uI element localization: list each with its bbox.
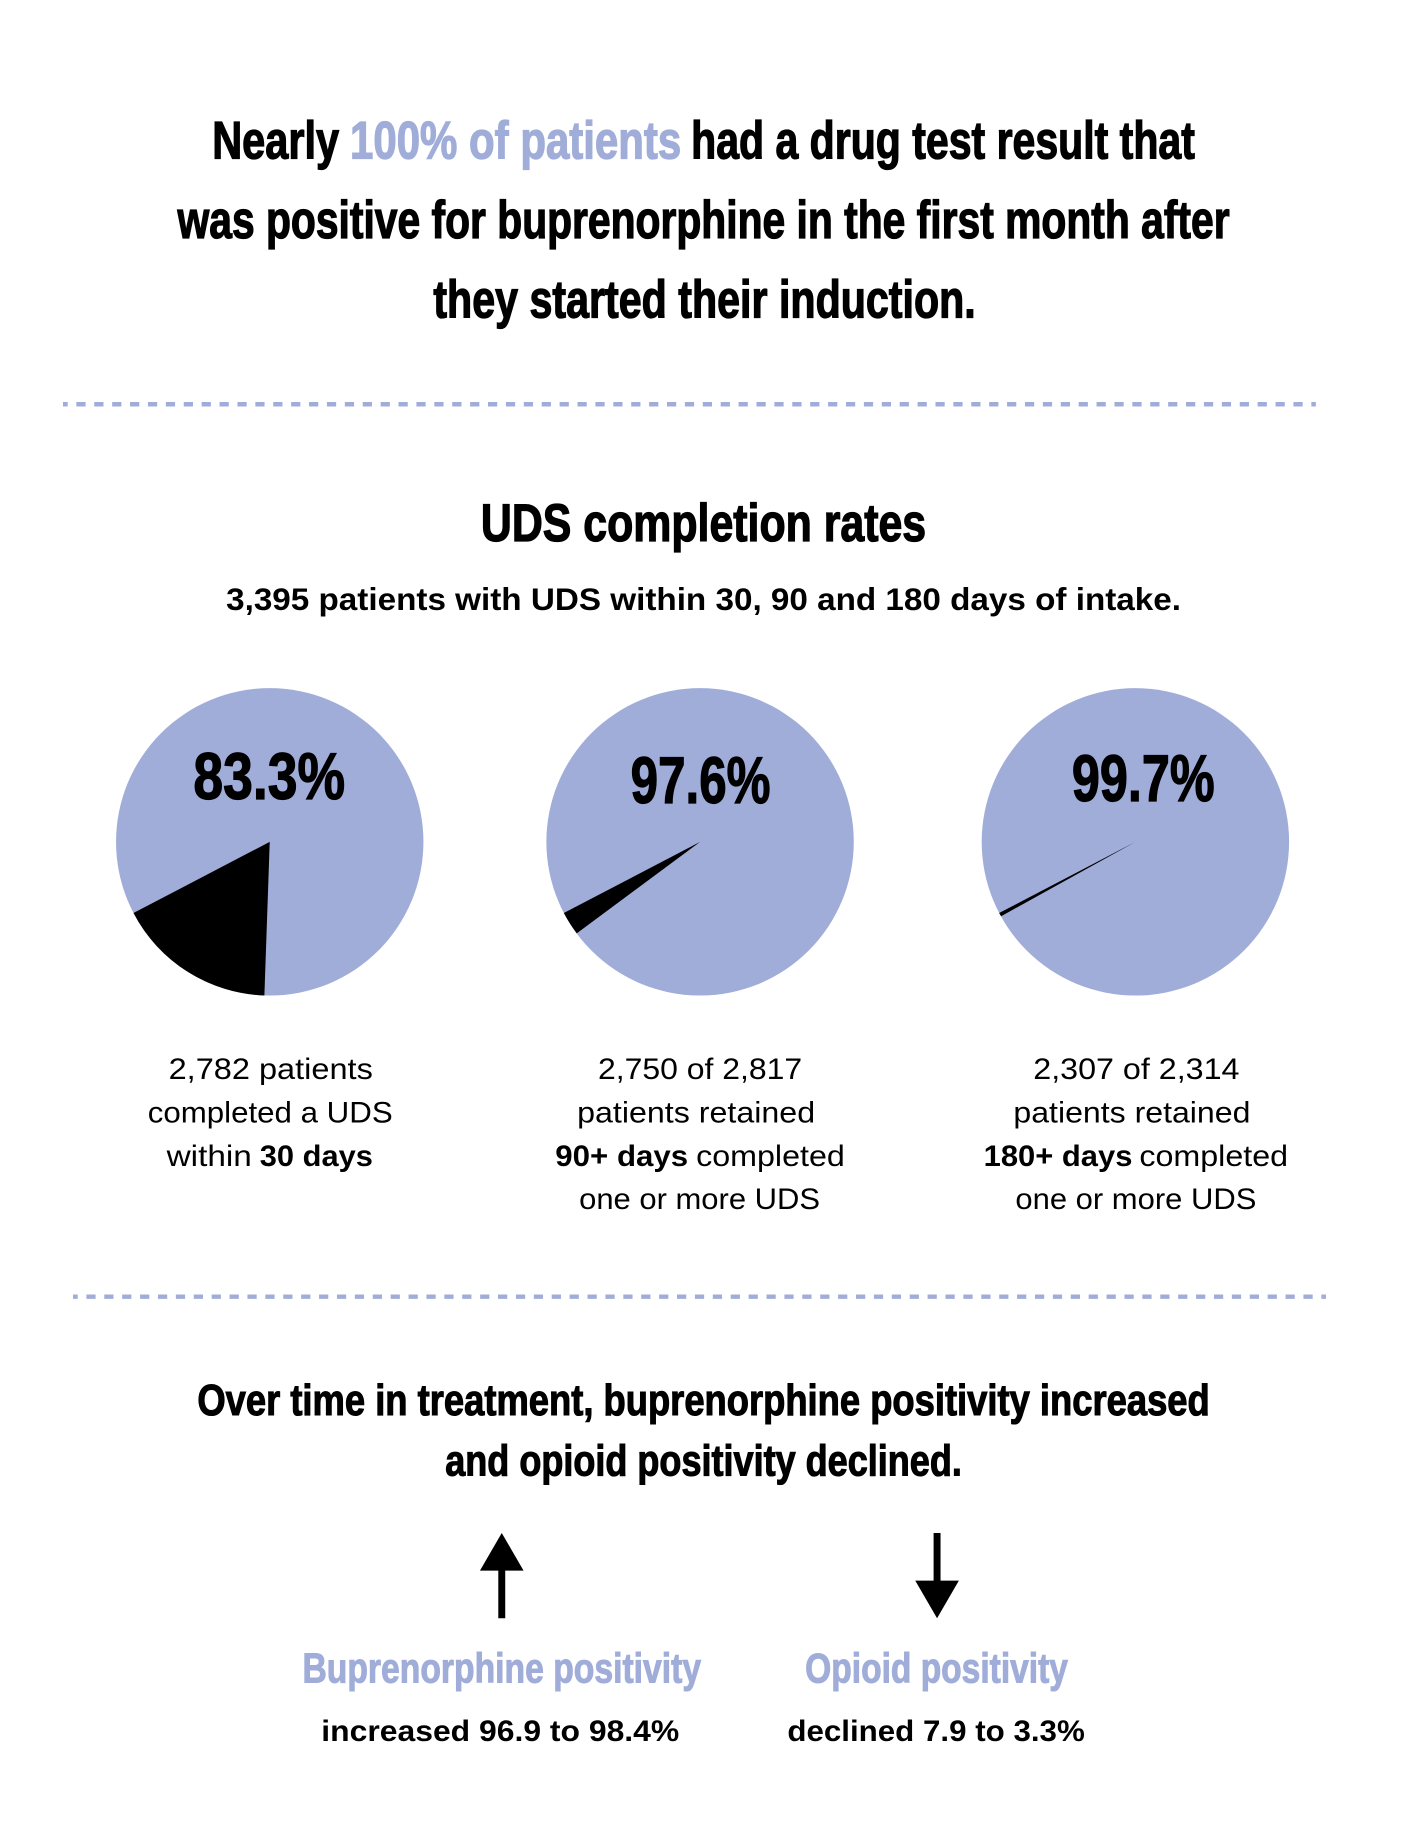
caption: 180+ days: completed	[1139, 1140, 1288, 1173]
value: increased: increased 96.9 to 98.4%	[321, 1715, 679, 1748]
heading: buprenorphine and opioid positivity: and opioid positivity declined.	[445, 1437, 962, 1485]
pie chart: 83.3%	[116, 688, 423, 996]
pie chart: 99.7%	[982, 688, 1289, 996]
caption: 90+ days	[555, 1053, 845, 1216]
subheading: 3,395 patients with UDS within 30, 90 and 180 days of intake.	[226, 581, 1181, 617]
title: they started their induction.	[433, 270, 976, 329]
pie chart: 83.3%: 83.3%	[193, 740, 345, 813]
caption: 180+ days	[984, 1053, 1288, 1216]
title: had a drug test result that	[691, 112, 1195, 171]
caption: 30 days	[148, 1053, 393, 1173]
arrow: down	[915, 1533, 959, 1618]
title	[177, 112, 1230, 329]
label: opioid positivity: Opioid positivity	[805, 1645, 1068, 1692]
caption: 180+ days: patients retained	[1013, 1096, 1250, 1129]
heading: buprenorphine and opioid positivity	[197, 1377, 1210, 1485]
title: 100% of patients	[350, 112, 681, 171]
caption: 30 days: 30 days	[260, 1140, 373, 1173]
value: declined: declined 7.9 to 3.3%	[787, 1715, 1085, 1748]
caption: 90+ days: one or more UDS	[579, 1183, 820, 1216]
caption: 90+ days: completed	[696, 1140, 845, 1173]
caption: 180+ days: one or more UDS	[1015, 1183, 1256, 1216]
heading: UDS completion rates: UDS completion rates	[481, 494, 926, 553]
pie chart: 99.7%: 99.7%	[1072, 742, 1215, 815]
arrow: up	[480, 1533, 524, 1618]
caption: 180+ days: 180+ days	[984, 1140, 1132, 1173]
caption: 30 days: 2,782 patients	[169, 1053, 373, 1086]
caption: 30 days: within	[165, 1140, 252, 1173]
caption: 30 days: completed a UDS	[148, 1096, 393, 1129]
caption: 90+ days: 2,750 of 2,817	[598, 1053, 802, 1086]
heading: buprenorphine and opioid positivity: Over time in treatment, buprenorphine positivity increased	[197, 1377, 1210, 1425]
label: buprenorphine positivity: Buprenorphine positivity	[302, 1645, 701, 1692]
caption: 180+ days: 2,307 of 2,314	[1033, 1053, 1240, 1086]
title: Nearly	[212, 112, 339, 171]
pie chart: 97.6%	[546, 688, 854, 996]
caption: 90+ days: patients retained	[577, 1096, 815, 1129]
pie chart: 97.6%: 97.6%	[631, 744, 770, 817]
caption: 90+ days: 90+ days	[555, 1140, 688, 1173]
